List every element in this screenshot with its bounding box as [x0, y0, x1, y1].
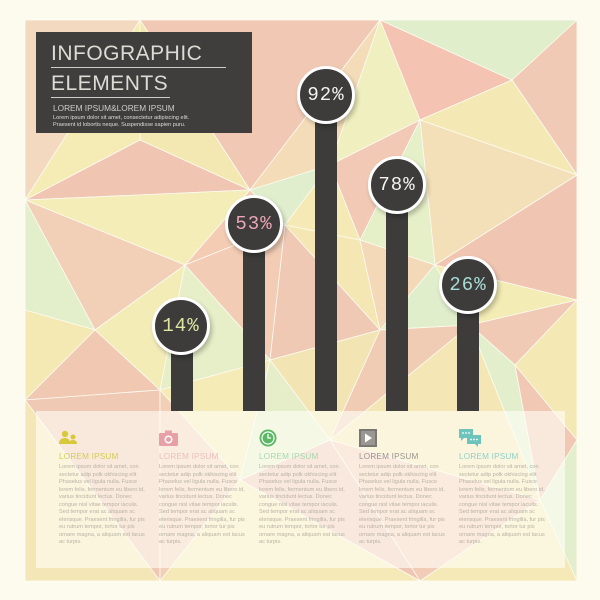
bar: 14% [152, 297, 214, 411]
icon: clock [260, 430, 276, 446]
subtitle text: Praesent id lobortis neque. Suspendisse sapien puru. [53, 122, 185, 128]
column 1: LOREM IPSUM [59, 452, 119, 461]
title: INFOGRAPHIC [51, 42, 202, 65]
icon: camera [159, 430, 178, 446]
bar chart: 14% [162, 315, 200, 337]
subtitle text [53, 103, 189, 128]
subtitle text: Lorem ipsum dolor sit amet, consectetur adipiscing elit. [53, 115, 189, 121]
bar: 78% [368, 156, 430, 411]
column 4: Lorem ipsum dolor sit amet, con sectetur adip polk okhiscing elit Phaselus vel ligula nulla. Fusce lorem felis, fermentum eu libero id, varius tincidunt lectus. Donec congue nisl vitae tempor iaculis. Sed tempor erat ac aliquam sc elerisque. Praesent fringilla, fur pis eu rutrum tempor, tortor tur pis ornare magna, a aliquam est lacus ac turpis. [359, 464, 445, 545]
bar: 92% [296, 66, 360, 411]
title box [36, 32, 252, 133]
column 5: LOREM IPSUM [459, 452, 519, 461]
column 3: Lorem ipsum dolor sit amet, con sectetur adip polk okhiscing elit Phaselus vel ligula nulla. Fusce lorem felis, fermentum eu libero id, varius tincidunt lectus. Donec congue nisl vitae tempor iaculis. Sed tempor erat ac aliquam sc elerisque. Praesent fringilla, fur pis eu rutrum tempor, tortor tur pis ornare magna, a aliquam est lacus ac turpis. [259, 464, 345, 545]
title: ELEMENTS [51, 72, 168, 95]
bar: 26% [438, 256, 502, 411]
title [51, 42, 226, 98]
column 3: LOREM IPSUM [259, 452, 319, 461]
column 2: LOREM IPSUM [159, 452, 219, 461]
bar chart [152, 66, 502, 411]
bar chart: 92% [307, 84, 345, 106]
column 2: Lorem ipsum dolor sit amet, con sectetur adip polk okhiscing elit Phaselus vel ligula nulla. Fusce lorem felis, fermentum eu libero id, varius tincidunt lectus. Donec congue nisl vitae tempor iaculis. Sed tempor erat ac aliquam sc elerisque. Praesent fringilla, fur pis eu rutrum tempor, tortor tur pis ornare magna, a aliquam est lacus ac turpis. [159, 464, 245, 545]
icon: chat [459, 429, 481, 447]
bar chart: 26% [449, 274, 487, 296]
column 4 [359, 429, 445, 545]
column 5: Lorem ipsum dolor sit amet, con sectetur adip polk okhiscing elit Phaselus vel ligula nulla. Fusce lorem felis, fermentum eu libero id, varius tincidunt lectus. Donec congue nisl vitae tempor iaculis. Sed tempor erat ac aliquam sc elerisque. Praesent fringilla, fur pis eu rutrum tempor, tortor tur pis ornare magna, a aliquam est lacus ac turpis. [459, 464, 545, 545]
text panel [36, 411, 565, 568]
column 5 [459, 429, 545, 545]
bar: 53% [224, 195, 288, 411]
icon: people [59, 430, 77, 444]
bar chart: 78% [378, 174, 416, 196]
bar chart: 53% [235, 213, 273, 235]
column 1: Lorem ipsum dolor sit amet, con sectetur adip polk okhiscing elit Phaselus vel ligula nulla. Fusce lorem felis, fermentum eu libero id, varius tincidunt lectus. Donec congue nisl vitae tempor iaculis. Sed tempor erat ac aliquam sc elerisque. Praesent fringilla, fur pis eu rutrum tempor, tortor tur pis ornare magna, a aliquam est lacus ac turpis. [59, 464, 145, 545]
icon: play [359, 429, 377, 447]
column 4: LOREM IPSUM [359, 452, 419, 461]
subtitle text: LOREM IPSUM&LOREM IPSUM [53, 103, 175, 113]
